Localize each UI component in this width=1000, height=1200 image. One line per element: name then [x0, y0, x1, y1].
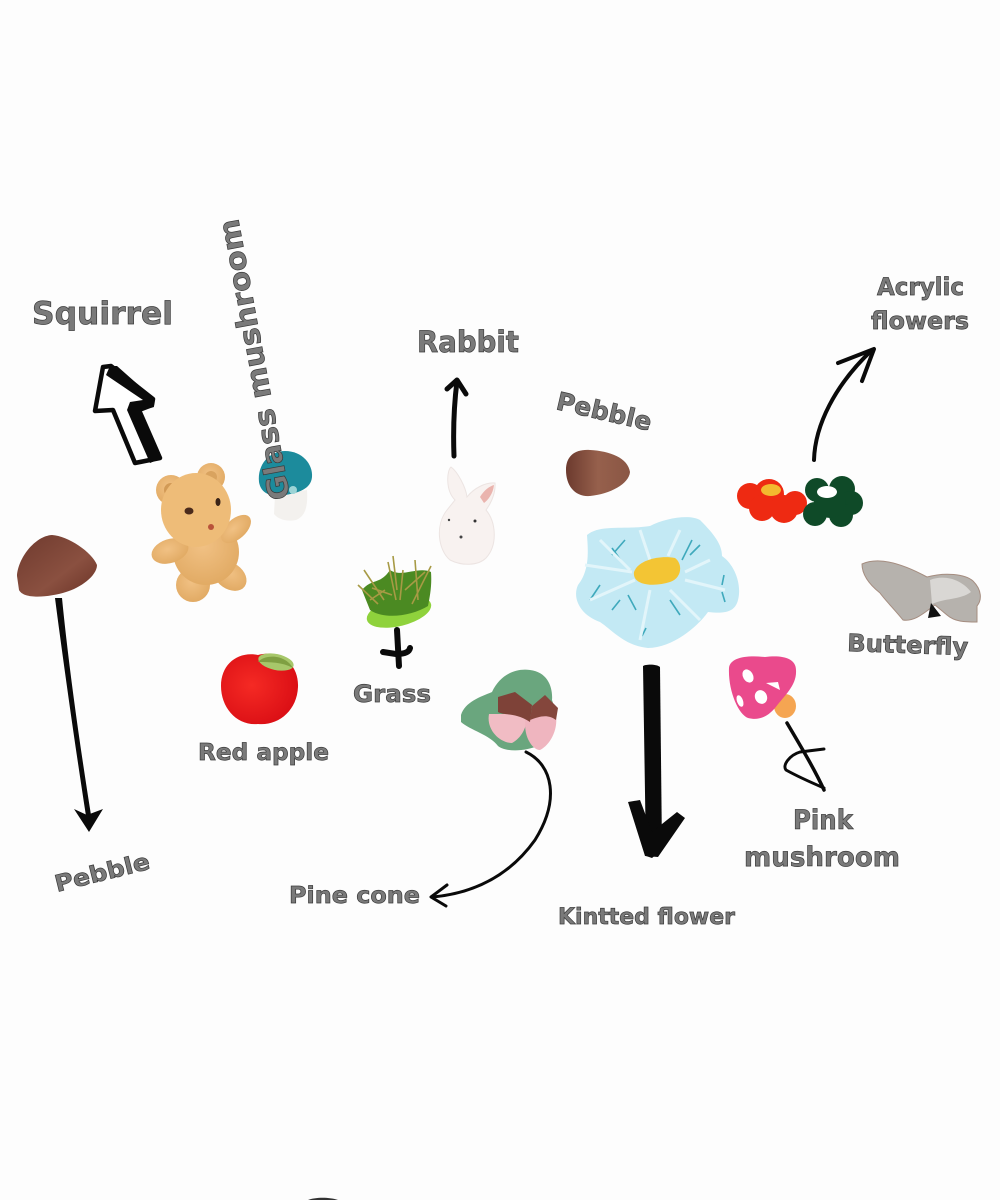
icon: left pebble: [17, 535, 97, 597]
arrow: up to Rabbit: [447, 380, 466, 456]
arrow: down to left Pebble: [55, 598, 103, 832]
label: Pine cone: Pine cone: [289, 883, 420, 909]
icon: grass tuft: [358, 556, 434, 634]
label: Acrylic flowers: [871, 273, 969, 335]
icon: red acrylic flower: [737, 479, 807, 523]
label: Grass: Grass: [353, 680, 431, 708]
icon: acorn pine cone: [461, 670, 558, 750]
label: Glass mushroom: Glass mushroom: [212, 216, 297, 503]
label: Pink mushroom: Pink: [793, 805, 854, 836]
label: Squirrel: Squirrel: [32, 296, 173, 332]
label: right Pebble: Pebble: [554, 387, 655, 437]
icon: glass mushroom: [259, 451, 312, 521]
label: Pink mushroom: [744, 805, 900, 873]
icon: knitted flower: [576, 517, 739, 648]
icon: pink mushroom: [729, 656, 796, 719]
icon: silver butterfly: [862, 561, 980, 622]
arrow: outlined arrow to Squirrel: [95, 366, 162, 463]
arrow: curved to Pine cone: [431, 752, 550, 906]
arrow: cross mark to Grass: [383, 630, 410, 666]
icon: rabbit: [439, 467, 495, 564]
label: Pink mushroom: mushroom: [744, 842, 900, 873]
icon: red apple: [221, 650, 298, 724]
label: Kintted flower: Kintted flower: [558, 905, 735, 930]
arrow: down to Knitted flower: [628, 665, 685, 858]
label: Acrylic flowers: Acrylic: [877, 273, 964, 301]
label: Red apple: Red apple: [198, 740, 329, 766]
label: Rabbit: Rabbit: [417, 325, 519, 359]
arrow: cross mark to Pink mushroom: [785, 723, 824, 790]
arrow: curved to Acrylic flowers: [814, 349, 874, 460]
icon: right pebble: [566, 450, 630, 496]
icon: green acrylic flower: [803, 476, 863, 527]
label: Acrylic flowers: flowers: [871, 307, 969, 335]
icon: squirrel figure: [148, 463, 256, 602]
label: Butterfly: Butterfly: [847, 629, 969, 661]
label: left Pebble: Pebble: [52, 849, 153, 898]
